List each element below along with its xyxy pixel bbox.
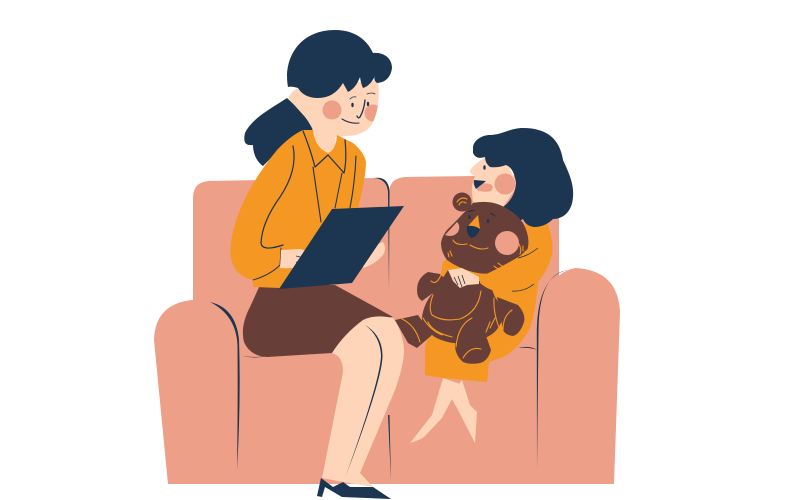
bear pink face patch [445,222,459,236]
child front leg [410,378,460,443]
child arm line [512,248,538,291]
child fingers [454,275,465,287]
bear snout [468,215,480,229]
woman right hand [363,242,385,268]
woman hair [287,30,392,98]
child back leg [450,380,477,443]
woman shoe [317,478,391,499]
woman [230,30,404,499]
bear eyes and brows [468,210,496,223]
sofa right arm [536,268,620,484]
child cheek [494,174,516,194]
woman face and neck [288,80,379,153]
bear body [422,270,502,343]
woman fingers [296,256,312,265]
bear head [441,202,528,274]
sofa back [193,175,559,360]
child eye [483,165,486,170]
bear right paw [497,297,524,336]
child dress [425,222,552,382]
tablet [279,206,404,289]
bear nose [467,226,480,238]
child mouth inside [474,180,486,189]
child hugging arm [480,232,550,292]
woman ponytail [244,98,317,166]
bear orange details [402,198,523,358]
bear ear [452,192,472,212]
woman leg [322,316,404,487]
woman facial features [342,93,375,123]
sofa seam lines [210,178,568,482]
child mouth [476,182,493,192]
woman skirt [243,285,393,357]
bear [395,192,528,364]
child [395,128,573,443]
child face [470,157,518,207]
woman cheeks [322,100,382,122]
bear foot [455,318,491,364]
sofa seat [230,353,540,484]
child hair [473,128,573,227]
woman leg line [345,325,383,478]
sofa [154,175,620,484]
illustration: woman talking with a child on a sofa [154,30,620,499]
bear cheek [495,231,519,255]
woman left hand [280,249,313,268]
child hand [448,268,479,288]
sofa left arm [154,300,240,484]
woman sweater [230,130,366,288]
bear left arm [417,272,448,301]
woman sweater lines [253,131,356,280]
bear left leg [395,315,432,348]
